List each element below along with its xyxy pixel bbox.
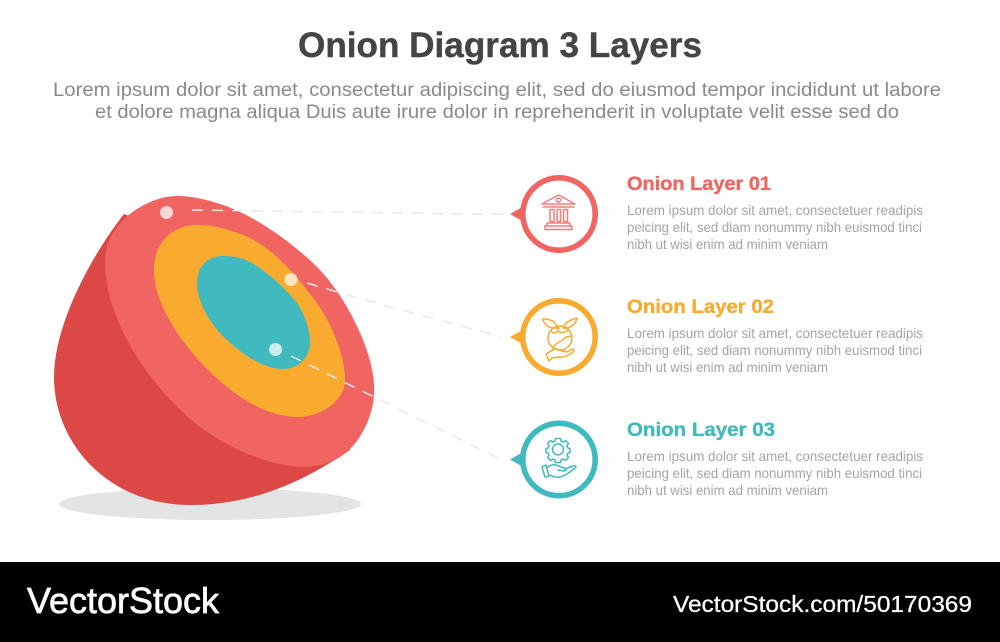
- title: Onion Diagram 3 Layers: [298, 26, 702, 65]
- text block layer 1: nibh ut wisi enim ad minim veniam: [627, 236, 828, 252]
- text block layer 2: nibh ut wisi enim ad minim veniam: [627, 359, 828, 375]
- watermark footer bar: [0, 562, 1000, 642]
- connector line layer 1: [192, 210, 510, 214]
- icon: bank building: [542, 195, 575, 230]
- connector line layer 3: [291, 356, 498, 458]
- badge layer 1: [510, 178, 595, 250]
- badge layer 2: [510, 301, 595, 373]
- marker dot layer 2: [284, 273, 298, 286]
- text block layer 3: Onion Layer 03: [627, 420, 775, 441]
- subtitle text block: et dolore magna aliqua Duis aute irure dolor in reprehenderit in voluptate velit esse sed do: [95, 102, 899, 123]
- footer image url: VectorStock.com/50170369: [673, 591, 972, 617]
- footer brand name: VectorStock: [27, 580, 220, 621]
- onion outer body: [54, 214, 350, 505]
- text block layer 1: [627, 174, 923, 252]
- text block layer 3: peicing elit, sed diam nonummy nibh euismod tinci: [627, 465, 922, 481]
- text block layer 2: Onion Layer 02: [627, 297, 774, 318]
- subtitle text block: [53, 80, 941, 123]
- text block layer 2: Lorem ipsum dolor sit amet, consectetuer readipis: [627, 325, 923, 341]
- marker dot layer 3: [269, 343, 282, 356]
- ground shadow: [59, 488, 361, 520]
- text block layer 1: peicing elit, sed diam nonummy nibh euismod tinci: [627, 219, 922, 235]
- layer 2 orange: [154, 225, 345, 417]
- icon: gear over open hand: [542, 438, 576, 477]
- layer 1 cut face: [105, 196, 374, 467]
- onion diagram: [54, 196, 374, 505]
- connector line layer 2: [307, 283, 502, 337]
- text block layer 3: Lorem ipsum dolor sit amet, consectetuer readipis: [627, 448, 923, 464]
- text block layer 1: Onion Layer 01: [627, 174, 771, 195]
- text block layer 3: nibh ut wisi enim ad minim veniam: [627, 482, 828, 498]
- text block layer 2: peicing elit, sed diam nonummy nibh euismod tinci: [627, 342, 922, 358]
- icon: globe with leaves and hand: [543, 318, 577, 361]
- text block layer 3: [627, 420, 923, 498]
- badge layer 3: [510, 423, 595, 496]
- subtitle text block: Lorem ipsum dolor sit amet, consectetur adipiscing elit, sed do eiusmod tempor incididunt ut labore: [53, 80, 941, 101]
- layer 3 teal core: [197, 256, 310, 369]
- text block layer 2: [627, 297, 923, 375]
- text block layer 1: Lorem ipsum dolor sit amet, consectetuer readipis: [627, 202, 923, 218]
- marker dot layer 1: [160, 206, 173, 219]
